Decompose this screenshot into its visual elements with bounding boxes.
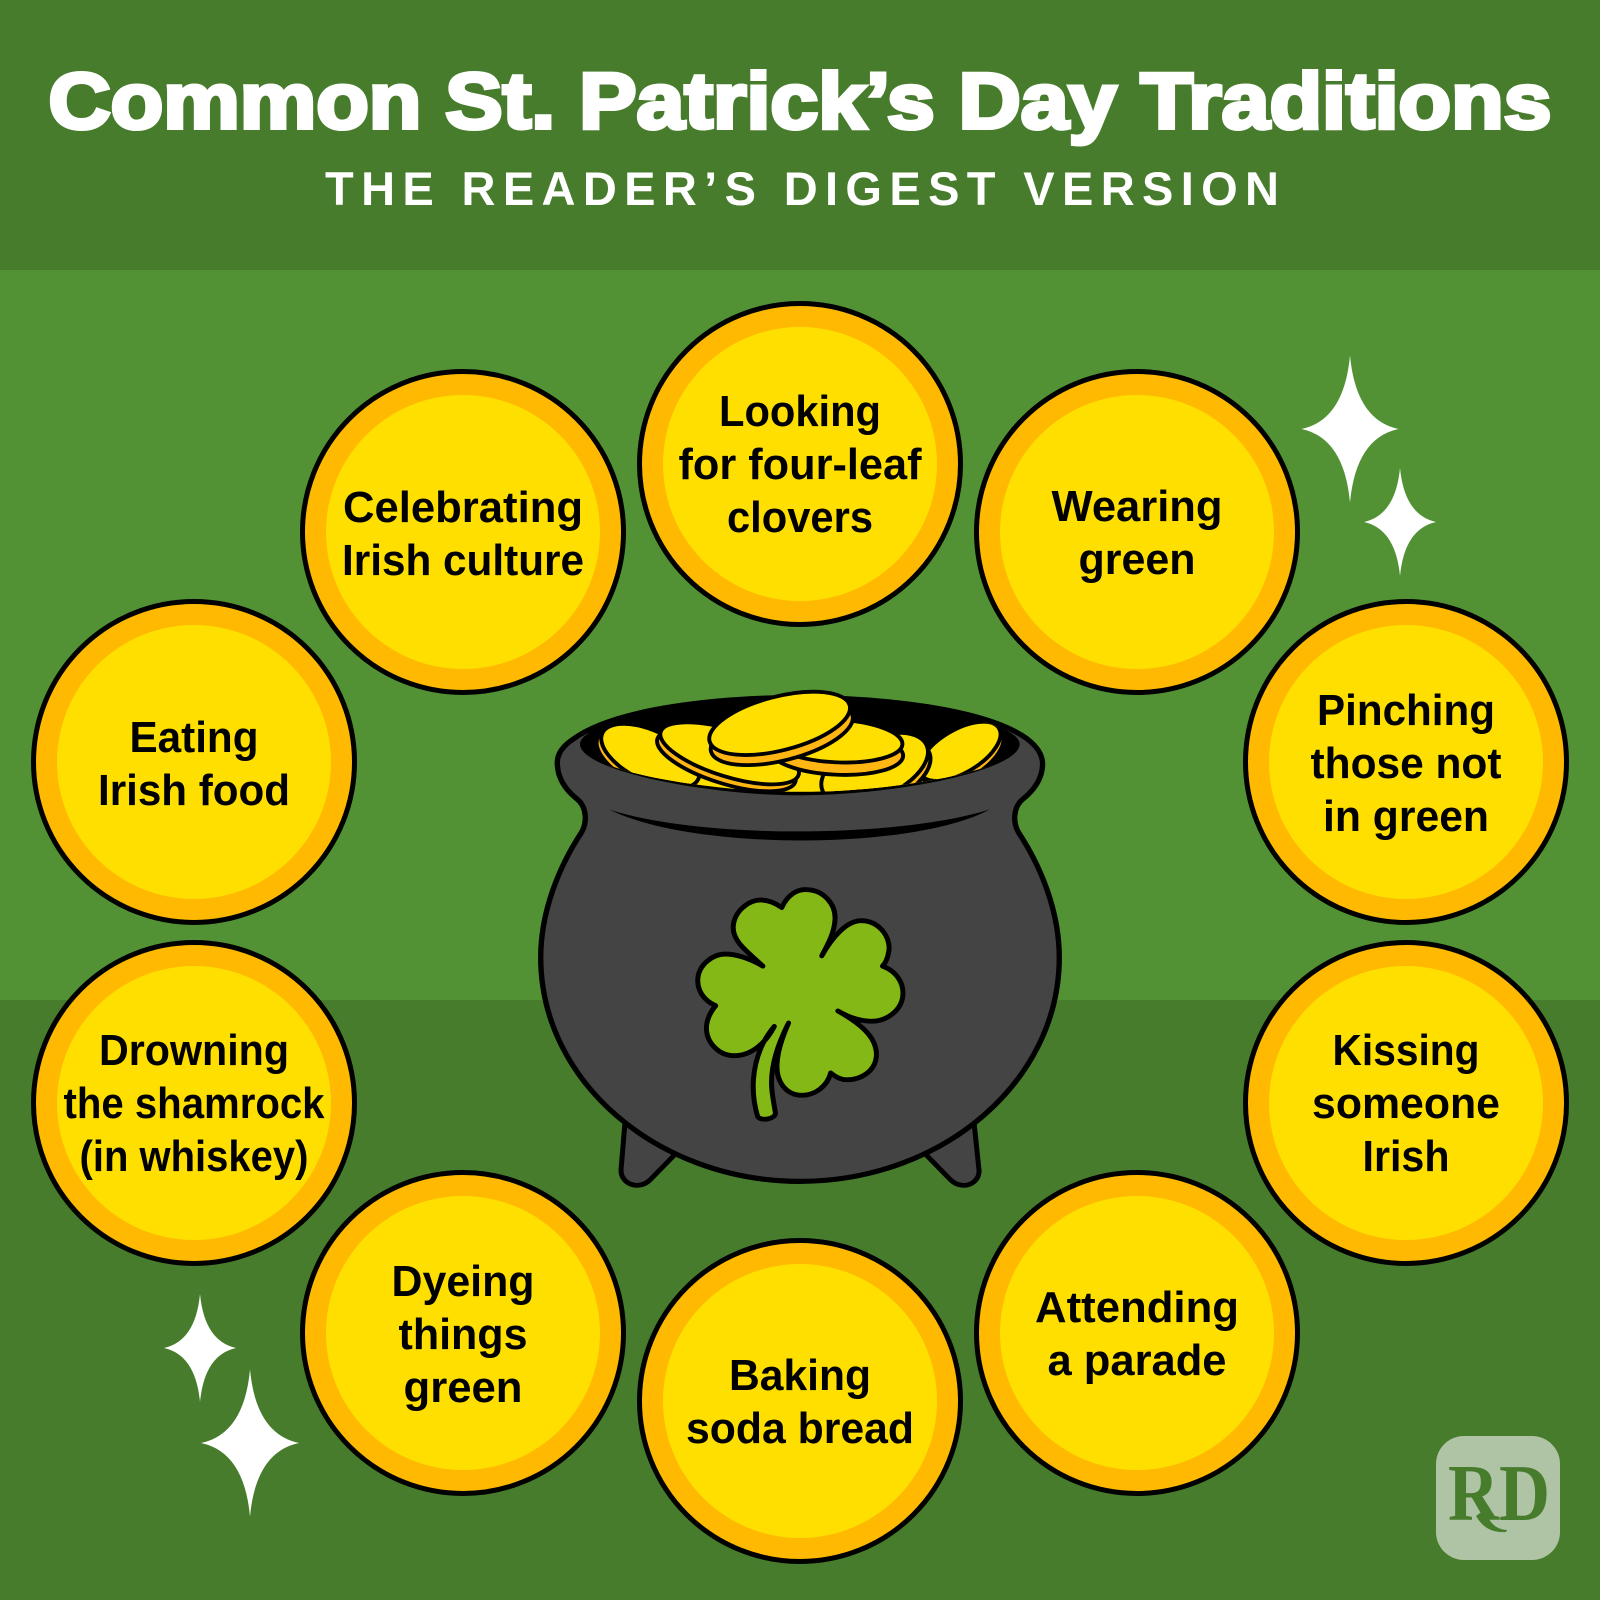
icon: small sparkle upper right	[1364, 468, 1436, 576]
coin: Pinching those not in green: Pinching	[1317, 686, 1495, 735]
coins inside the pot	[586, 710, 1013, 825]
coin: Dyeing things green: things	[398, 1310, 528, 1359]
pot body	[541, 698, 1059, 1181]
coin: Looking for four-leaf clovers: for four-leaf	[678, 440, 922, 489]
icon: large sparkle upper right	[1302, 356, 1398, 502]
coin: Eating Irish food: Irish food	[98, 766, 290, 815]
coin: Looking for four-leaf clovers: clovers	[727, 493, 873, 542]
coin: Pinching those not in green	[1246, 602, 1566, 922]
subtitle: THE READER’S DIGEST VERSION	[325, 162, 1279, 215]
coin: Kissing someone Irish: someone	[1312, 1079, 1500, 1128]
coin: Looking for four-leaf clovers: Looking	[719, 387, 881, 436]
background: upper light green band	[0, 270, 1600, 1000]
icon: small sparkle lower left	[164, 1294, 236, 1402]
coin right-center	[768, 716, 904, 778]
coin: Drowning the shamrock (in whiskey)	[34, 942, 354, 1264]
coin: Dyeing things green	[302, 1172, 624, 1494]
coin: Dyeing things green: Dyeing	[392, 1257, 534, 1306]
coin: Wearing green	[976, 372, 1298, 692]
logo: RD badge: RD	[1448, 1450, 1550, 1538]
pot neck groove	[609, 809, 990, 840]
coin: Baking soda bread: Baking	[729, 1351, 871, 1400]
icon: pot of gold	[541, 679, 1059, 1185]
background: lower dark green band	[0, 1000, 1600, 1600]
coin: Wearing green: Wearing	[1052, 482, 1222, 531]
coin: Kissing someone Irish: Irish	[1362, 1132, 1450, 1181]
coin: Looking for four-leaf clovers	[640, 304, 960, 624]
coin: Kissing someone Irish	[1246, 942, 1566, 1264]
coin: Wearing green: green	[1078, 535, 1196, 584]
coin: Dyeing things green: green	[404, 1363, 522, 1412]
icon: large sparkle lower left	[201, 1370, 299, 1516]
coin: Celebrating Irish culture	[302, 372, 624, 692]
coin: Baking soda bread: soda bread	[686, 1404, 914, 1453]
top coin	[702, 679, 860, 778]
coin: Baking soda bread	[640, 1240, 960, 1562]
coin left-center	[650, 709, 806, 804]
coin: Attending a parade: a parade	[1048, 1336, 1226, 1385]
coin: Drowning the shamrock (in whiskey): the shamrock	[64, 1079, 325, 1128]
coin: Celebrating Irish culture: Celebrating	[343, 483, 583, 532]
coin: Attending a parade: Attending	[1035, 1283, 1239, 1332]
coin: Drowning the shamrock (in whiskey): (in whiskey)	[80, 1132, 308, 1181]
coin: Pinching those not in green: those not	[1310, 739, 1502, 788]
coin: Kissing someone Irish: Kissing	[1332, 1026, 1480, 1075]
coin: Drowning the shamrock (in whiskey): Drowning	[99, 1026, 289, 1075]
coin: Eating Irish food: Eating	[130, 713, 258, 762]
coin: Pinching those not in green: in green	[1323, 792, 1489, 841]
coin: Celebrating Irish culture: Irish culture	[342, 536, 584, 585]
coin: Attending a parade	[976, 1172, 1298, 1494]
header panel	[0, 0, 1600, 270]
logo: RD badge	[1436, 1436, 1560, 1560]
coin: Eating Irish food	[34, 602, 354, 922]
pot feet	[621, 1118, 979, 1185]
pot opening	[580, 695, 1020, 795]
title: Common St. Patrick’s Day Traditions	[48, 56, 1552, 145]
icon: shamrock	[698, 890, 903, 1119]
